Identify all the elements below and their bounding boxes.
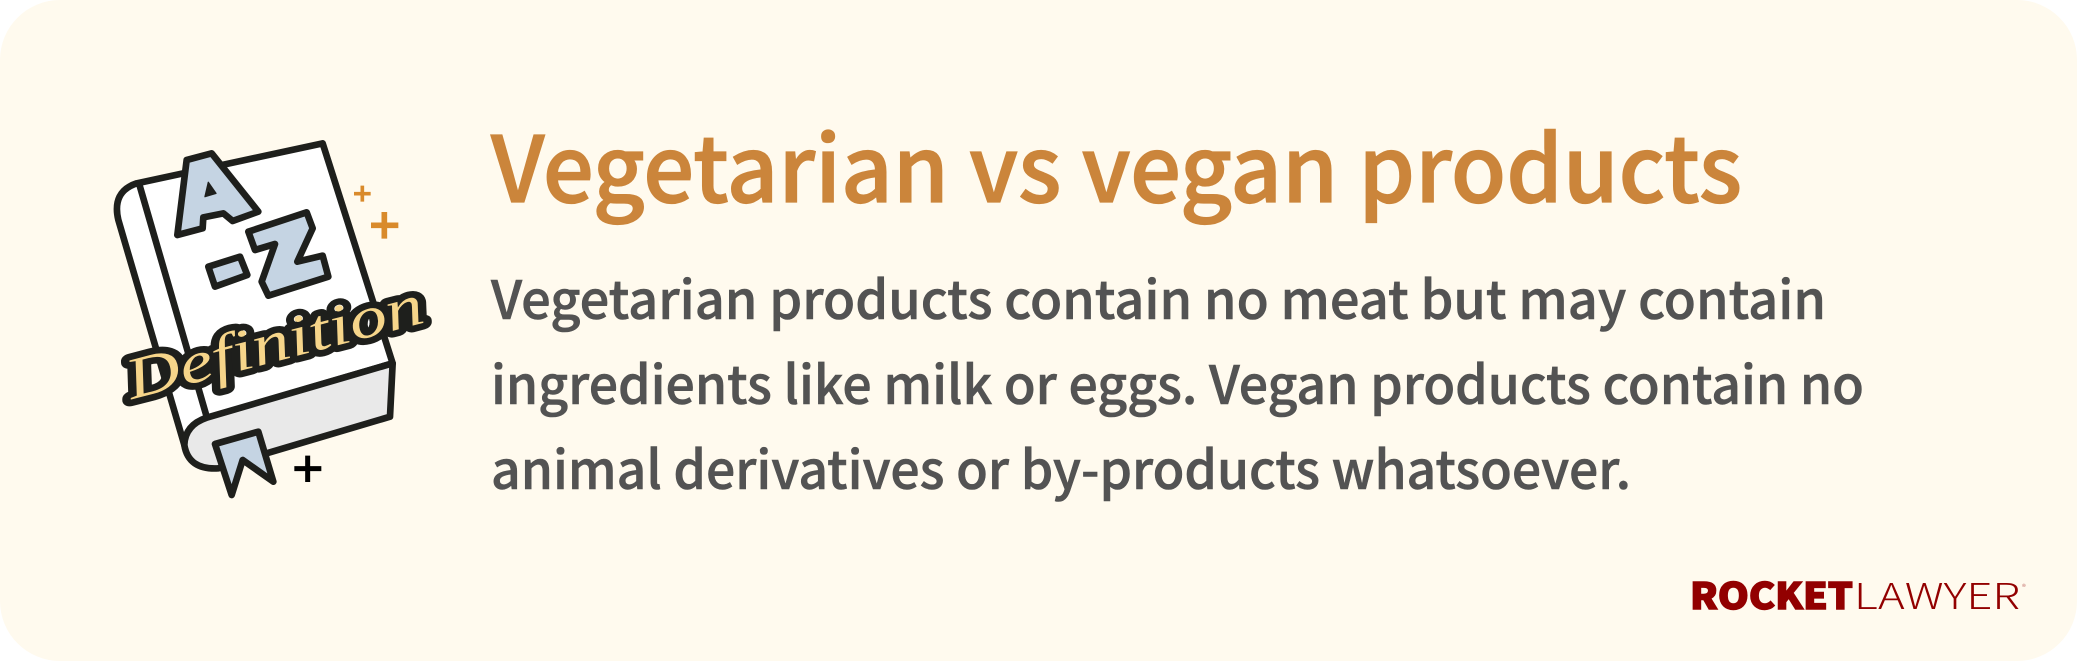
icon: definition book (117, 143, 430, 495)
bookmark (215, 432, 273, 495)
sparkle black (294, 456, 321, 482)
letter A (177, 153, 258, 235)
logo word lawyer: LAWYER (1854, 568, 2020, 620)
definition script label: Definition (117, 272, 430, 412)
body line 3: animal derivatives or by-products whatsoever. (491, 429, 1631, 505)
dash (208, 257, 247, 287)
book pages (184, 363, 393, 468)
book cover (117, 143, 393, 445)
letter Z (248, 212, 328, 296)
logo registered mark: ® (2022, 582, 2026, 593)
body text (490, 259, 1864, 505)
logo: Rocket Lawyer (1690, 568, 2026, 620)
logo word rocket: ROCKET (1690, 568, 1853, 620)
body line 1: Vegetarian products contain no meat but may contain (490, 259, 1826, 335)
sparkle small orange (354, 186, 371, 202)
letter A counter (205, 182, 216, 197)
book spine line (139, 183, 207, 417)
sparkle large orange (371, 212, 398, 239)
title: Vegetarian vs vegan products (490, 97, 1742, 229)
body line 2: ingredients like milk or eggs. Vegan products contain no (491, 344, 1864, 420)
